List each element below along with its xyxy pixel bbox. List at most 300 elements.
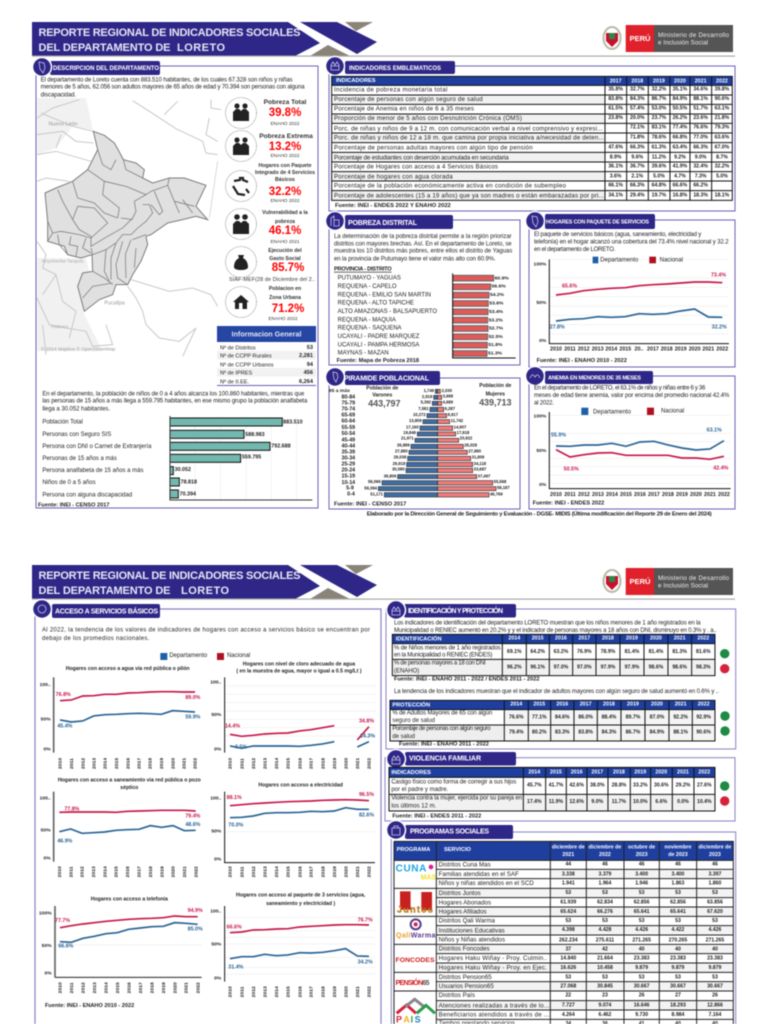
table: proteccion: PROTECCIÓN — [392, 701, 430, 709]
table: programas sociales: 3.400 — [672, 871, 685, 877]
line chart: nivel de cloro adecuado: 0.5% — [235, 744, 247, 750]
bar chart: poblacion: Persona con DNI o Carnet de Extranjería — [42, 444, 152, 450]
line chart: hogares con paquete: Fuente: INEI - ENAHO 2010 - 2022 — [537, 358, 627, 364]
legend: departamento y nacional: Departamento — [169, 653, 208, 659]
header banner: page 2: DEL DEPARTAMENTO DE — [38, 585, 170, 597]
line chart: electricidad: 2015 — [286, 866, 292, 877]
heading: indicadores emblematicos: INDICADORES EMBLEMATICOS — [349, 66, 441, 72]
chart: population pyramid: 15-19 — [342, 474, 355, 480]
table: programas sociales: 3.338 — [562, 871, 575, 877]
content: pobreza distrital text and bars: 53.4% — [489, 309, 504, 315]
map: Loreto department — [37, 98, 221, 356]
table: programas sociales: 65.641 — [634, 909, 650, 915]
header banner: page 1: LORETO — [177, 42, 225, 54]
table: violencia familiar: Castigo físico como forma de corregir a sus hijos — [391, 780, 516, 786]
table: informacion general: 2,281 — [299, 353, 313, 359]
table: proteccion: 2018 — [603, 701, 615, 707]
content: pobreza distrital text and bars: 53.2% — [489, 317, 503, 323]
table: indicadores: 83.1% — [652, 125, 667, 131]
table: violencia familiar: 2014 — [528, 770, 540, 776]
line chart: electricidad: Hogares con acceso a electricidad — [258, 783, 343, 789]
chart: population pyramid: 27,880 — [395, 449, 408, 454]
table: programas sociales: 53 — [639, 974, 645, 980]
table: violencia familiar — [389, 767, 715, 819]
stat: pobreza extrema: Pobreza Extrema — [259, 133, 313, 140]
table: indicadores: Porcentaje de Anemia en niños de 6 a 35 meses — [334, 106, 474, 113]
stat: poblacion en zona urbana — [226, 286, 304, 322]
table: indicadores: 35.1% — [673, 87, 688, 93]
text block: acceso intro: debajo de los promedios nacionales. — [42, 636, 150, 642]
table: programas sociales: 53 — [565, 890, 571, 896]
table: programas sociales: Hogares Haku Wiñay - Proy. Culmin.. — [439, 955, 547, 962]
line chart: nivel de cloro adecuado: 0% — [214, 746, 222, 752]
line chart: paquete de 3 servicios: 2020 — [343, 986, 349, 997]
content: pobreza distrital text and bars: 51.8% — [488, 342, 503, 348]
bar chart: poblacion: 78.818 — [181, 479, 197, 485]
content: pobreza distrital text and bars: PUTUMAYO - YAGUAS — [338, 275, 401, 281]
table: programas sociales — [394, 841, 733, 1024]
heading: piramide poblacional — [326, 368, 440, 386]
line chart: paquete de 3 servicios: 2019 — [332, 986, 338, 997]
table: programas sociales: 53 — [675, 918, 681, 924]
table: programas sociales: 1.946 — [635, 881, 648, 887]
chart: population pyramid: 50-54 — [342, 431, 355, 437]
text block: description: discapacidad. — [41, 93, 76, 99]
line chart: paquete de 3 servicios: 2010 — [228, 986, 234, 997]
header banner: page 1: DEL DEPARTAMENTO DE — [38, 42, 170, 54]
line chart: saneamiento: 2016 — [125, 866, 131, 877]
line chart: hogares con paquete: 100% — [534, 261, 547, 267]
table: programas sociales: 16.646 — [634, 1003, 650, 1009]
table: proteccion: 2022 — [698, 701, 710, 707]
line chart: nivel de cloro adecuado: 2022 — [367, 758, 373, 769]
table: programas sociales: 16.626 — [560, 965, 576, 971]
line chart: nivel de cloro adecuado: 2019 — [332, 758, 338, 769]
table: indicadores: 23.6% — [693, 115, 708, 121]
chart: population pyramid: Varones — [372, 393, 392, 399]
table: violencia familiar: 33.2% — [633, 782, 648, 788]
line chart: hogares con paquete: 2012 — [578, 347, 590, 353]
heading: pobreza distrital — [326, 212, 453, 230]
line chart: electricidad: 88.1% — [227, 795, 242, 801]
line chart: agua via red publica: 0% — [43, 746, 51, 752]
logo: foncodes: FONCODES — [396, 957, 435, 964]
table: programas sociales: 1.860 — [709, 881, 722, 887]
line chart: hogares con paquete: 2021 — [702, 347, 714, 353]
line chart: anemia: Departamento — [593, 410, 632, 416]
stat: hogares con paquete integrado: 32.2% — [269, 186, 301, 198]
line chart: telefonia: 77.7% — [55, 918, 70, 924]
map: Loreto department: Moyobamba Tarapoto — [42, 258, 84, 263]
table: proteccion: 2014 — [510, 701, 522, 707]
line chart: anemia: Fuente: INEI - ENDES 2022 — [533, 500, 604, 506]
table: indicadores: Porcentaje de Hogares con acceso a 4 Servicios Básicos — [334, 163, 498, 170]
content: pobreza distrital text and bars: 52.5% — [489, 334, 503, 340]
line chart: agua via red publica: 45.4% — [57, 723, 73, 729]
chart: population pyramid: 59,394 — [364, 485, 378, 490]
table: indicadores: 21.8% — [715, 115, 730, 121]
table: indicadores: 26.2% — [673, 115, 688, 121]
chart: population pyramid: 31,809 — [472, 454, 485, 459]
line chart: saneamiento — [40, 778, 201, 877]
chart: population pyramid: 3,698 — [443, 394, 454, 399]
line chart: hogares con paquete: 20.. — [635, 347, 644, 353]
panel: indicadores emblematicos — [326, 56, 735, 211]
table: identificacion: 81.4% — [649, 649, 664, 655]
table: programas sociales: Beneficiarios atendidos a través de ... — [439, 1011, 550, 1018]
table: programas sociales: 30.667 — [707, 984, 723, 990]
chart: population pyramid: 58,187 — [497, 485, 510, 490]
logo: pension 65: PENSIÓN65 — [396, 978, 430, 987]
heading: identificacion y proteccion: IDENTIFICACIÓN Y PROTECCIÓN — [408, 606, 503, 615]
line chart: hogares con paquete: 2011 — [564, 347, 576, 353]
heading: programas sociales — [386, 820, 513, 840]
bar chart: poblacion: Población Total — [42, 420, 83, 426]
table: indicadores: 64.8% — [652, 183, 667, 189]
table: indicadores: 9.6% — [631, 154, 644, 160]
table: programas sociales: 2023 — [709, 852, 721, 858]
table: indicadores: Porc. de niñas y niños de 9 a 12 m. con comunicación verbal a nivel comprensivo y expresi... — [334, 125, 603, 132]
stat: pobreza total: ENAHO 2022 — [270, 121, 300, 127]
table: indicadores: 47.6% — [608, 144, 623, 150]
table: informacion general: 94 — [307, 362, 314, 368]
table: programas sociales: PROGRAMA — [397, 847, 430, 853]
table: identificacion: 2021 — [674, 636, 686, 642]
table: violencia familiar: 2020 — [655, 770, 667, 776]
table: programas sociales: 9.879 — [709, 965, 722, 971]
content: pobreza distrital text and bars: MAYNAS - MAZAN — [338, 351, 389, 357]
panel: piramide poblacional — [326, 368, 520, 509]
table: indicadores: 36.1% — [608, 163, 623, 169]
footer note: elaborado por: Elaborado por la Dirección General de Seguimiento y Evaluación - DGSE- MIDIS (Última modificación del Reporte 29 de Enero del 2024) — [367, 510, 712, 518]
table: informacion general: 6,264 — [299, 379, 314, 385]
line chart: hogares con paquete: 0% — [539, 338, 547, 344]
table: indicadores: 3.6% — [610, 173, 622, 179]
table: violencia familiar: 2021 — [677, 770, 689, 776]
table: violencia familiar: 2019 — [634, 770, 646, 776]
table: identificacion: 69.1% — [507, 649, 522, 655]
line chart: agua via red publica — [40, 666, 201, 769]
content: pobreza distrital text and bars: muestra los 10 distritos más pobres, entre ellos el distrito de Yaguas — [334, 249, 512, 255]
line chart: anemia: 2016 — [634, 492, 646, 498]
line chart: saneamiento: 79.4% — [185, 813, 201, 819]
line chart: saneamiento: 2015 — [114, 866, 120, 877]
table: indicadores: 32.2% — [652, 87, 667, 93]
table: programas sociales: 23.383 — [670, 956, 686, 962]
line chart: agua via red publica: 2017 — [136, 758, 142, 769]
table: programas sociales: 22 — [565, 993, 571, 999]
line chart: saneamiento: 2017 — [137, 866, 143, 877]
line chart: telefonia: 94.9% — [188, 908, 203, 914]
table: violencia familiar: 2016 — [571, 770, 583, 776]
table: indicadores: 50.5% — [673, 106, 688, 112]
table: programas sociales: 4.264 — [562, 1012, 575, 1018]
bar chart: poblacion: 792.688 — [271, 444, 291, 450]
line chart: hogares con paquete: 2014 — [605, 347, 617, 353]
chart: population pyramid: 56,066 — [368, 479, 381, 484]
table: violencia familiar: 2022 — [698, 770, 710, 776]
line chart: agua via red publica: 2022 — [193, 758, 199, 769]
bar chart: poblacion: 70.394 — [180, 491, 196, 497]
table: identificacion: Municipalidad o RENIEC aumentó en 20.2% y y el indicador de personas mayores a 18 años con DNI, disminuyo en 0.3% y . a.. — [394, 628, 717, 634]
table: violencia familiar: 2015 — [550, 770, 562, 776]
line chart: hogares con paquete: 32.2% — [712, 325, 727, 331]
table: programas sociales: 46 — [675, 862, 681, 868]
line chart: paquete de 3 servicios: 34.2% — [358, 959, 373, 965]
table: violencia familiar: 2018 — [613, 770, 625, 776]
line chart: agua via red publica: 2016 — [125, 758, 131, 769]
line chart: hogares con paquete: 27.8% — [550, 325, 565, 331]
line chart: hogares con paquete: en el departamento de LORETO. — [534, 247, 616, 253]
line chart: telefonia: 2019 — [161, 982, 167, 993]
heading: descripcion del departamento: DESCRIPCION DEL DEPARTAMENTO — [53, 66, 159, 72]
line chart: agua via red publica: Hogares con acceso a agua vía red pública o pilón — [66, 666, 190, 672]
table: programas sociales: 42 — [602, 946, 608, 952]
line chart: anemia: meses de edad tiene anemia, valor por encima del promedio nacional 42.4% — [534, 393, 730, 399]
table: programas sociales: 7.727 — [562, 1003, 575, 1009]
header banner: page 2: LORETO — [181, 585, 229, 597]
line chart: anemia: 0% — [539, 482, 547, 488]
table: identificacion: % de Niños menores de 1 año registrados — [394, 646, 501, 652]
table: programas sociales: Usuarios Pension65 — [439, 983, 494, 990]
table: informacion general: 456 — [304, 370, 313, 376]
table: violencia familiar: 11.7% — [612, 799, 627, 805]
table: indicadores: 16.8% — [673, 193, 688, 199]
line chart: hogares con paquete: 2017 — [647, 347, 659, 353]
line chart: paquete de 3 servicios: 2012 — [251, 986, 257, 997]
table: identificacion: 96.2% — [507, 665, 522, 671]
table: programas sociales: Hogares Haku Wiñay - Proy. en Ejec. — [439, 964, 547, 971]
table: indicadores: 9.2% — [674, 154, 686, 160]
table: programas sociales: 53 — [565, 974, 571, 980]
line chart: nivel de cloro adecuado: 2015 — [286, 758, 292, 769]
chart: population pyramid: 0-4 — [347, 492, 355, 498]
table: indicadores: 90.6% — [715, 96, 730, 102]
table: identificacion: Los indicadores de identificación del departamento LORETO muestran que los niños menores de 1 año registrados en la — [394, 620, 701, 626]
line chart: electricidad: 2016 — [297, 866, 303, 877]
table: programas sociales: 62.856 — [670, 899, 686, 905]
content: pobreza distrital text and bars: 51.3% — [488, 351, 503, 357]
table: programas sociales: 46 — [712, 862, 718, 868]
chart: population pyramid: 26,028 — [464, 443, 478, 448]
table: identificacion: 2018 — [602, 636, 614, 642]
table: programas sociales: 26 — [639, 993, 645, 999]
content: pobreza distrital text and bars: ALTO AMAZONAS - BALSAPUERTO — [338, 309, 437, 315]
table: proteccion: 84.6% — [555, 714, 570, 720]
table: indicadores: Porc. de niñas y niños de 12 a 18 m. que camina por propia iniciativa a/necesidad de deten... — [334, 134, 604, 141]
panel: identificacion y proteccion — [386, 600, 736, 749]
table: indicadores: 41.9% — [673, 163, 688, 169]
table: programas sociales: 53 — [712, 890, 718, 896]
logo: cuna mas: MAS — [421, 874, 436, 881]
table: indicadores: 66.2% — [693, 183, 708, 189]
chart: population pyramid: 34,118 — [474, 461, 487, 466]
table: violencia familiar: 6.6% — [655, 799, 668, 805]
table: indicadores: Porcentaje de personas adultas mayores con algún tipo de pensión — [334, 144, 533, 151]
table: informacion general: Nº de Distritos — [220, 344, 256, 352]
table: programas sociales: 40 — [712, 946, 718, 952]
line chart: anemia: 2021 — [704, 492, 716, 498]
chart: population pyramid: 5,392 — [421, 400, 432, 405]
logo: qali warma: QaliWarma — [396, 932, 435, 939]
bar chart: poblacion: 559.795 — [242, 455, 261, 461]
table: identificacion: 98.6% — [649, 665, 664, 671]
heading: violencia familiar — [386, 750, 516, 768]
table: indicadores — [332, 76, 732, 200]
table: programas sociales: noviembre — [664, 845, 691, 851]
stat: pobreza total: 39.8% — [269, 107, 301, 119]
table: violencia familiar: 27.6% — [697, 782, 712, 788]
chart: population pyramid: 27,890 — [468, 449, 482, 454]
bar chart: poblacion: Personas de 15 años a más — [42, 456, 117, 462]
chart: population pyramid: 1,749 — [424, 388, 435, 393]
line chart: saneamiento: 2020 — [171, 866, 177, 877]
table: indicadores: 83.8% — [608, 96, 623, 102]
line chart: saneamiento: 2013 — [91, 866, 97, 877]
table: indicadores: 18.3% — [693, 193, 708, 199]
stat: pobreza extrema — [226, 130, 313, 162]
line chart: telefonia: 2020 — [172, 982, 178, 993]
line chart: paquete de 3 servicios: 2017 — [309, 986, 315, 997]
table: indicadores: 51.7% — [693, 106, 708, 112]
table: indicadores: 34.6% — [693, 87, 708, 93]
line chart: anemia: 50.5% — [564, 467, 579, 473]
table: violencia familiar: 10.4% — [697, 799, 712, 805]
table: programas sociales: 271.265 — [706, 937, 724, 943]
line chart: anemia: 2013 — [592, 492, 604, 498]
line chart: electricidad: 2014 — [274, 866, 280, 877]
line chart: hogares con paquete: El paquete de servicios básicos (agua, saneamiento, electricidad y — [534, 232, 701, 238]
chart: population pyramid: 39,806 — [384, 473, 397, 478]
line chart: saneamiento: Hogares con acceso a saneamiento vía red pública o pozo — [58, 778, 201, 784]
table: indicadores: 77.0% — [693, 134, 708, 140]
text block: description: El departamento de Loreto cuenta con 883.510 habitantes, de los cuales 67.328 son niños y niñas — [41, 78, 293, 84]
line chart: saneamiento: 77.8% — [64, 806, 80, 812]
table: programas sociales: 2021 — [562, 852, 574, 858]
table: indicadores: 5.0% — [653, 173, 665, 179]
line chart: hogares con paquete: 73.4% — [711, 272, 726, 278]
line chart: saneamiento: séptico — [120, 785, 138, 791]
table: programas sociales: 66.276 — [597, 909, 613, 915]
header banner: page 1: REPORTE REGIONAL DE INDICADORES SOCIALES — [38, 27, 300, 39]
line chart: nivel de cloro adecuado: 2012 — [251, 758, 257, 769]
table: proteccion: 89.7% — [626, 714, 641, 720]
line chart: electricidad: 2022 — [367, 866, 373, 877]
line chart: telefonia: 2016 — [126, 982, 132, 993]
header banner: page 2 — [32, 565, 735, 600]
line chart: hogares con paquete: 2022 — [716, 347, 728, 353]
line chart: paquete de 3 servicios: 2018 — [320, 986, 326, 997]
table: indicadores: 66.6% — [673, 183, 688, 189]
chart: population pyramid: 29,918 — [393, 461, 406, 466]
line chart: electricidad: 96.5% — [359, 792, 374, 798]
table: programas sociales: 53 — [602, 890, 608, 896]
line chart: telefonia: 0% — [44, 971, 52, 977]
logo: Peru ministry, page 2 — [604, 568, 733, 595]
line chart: saneamiento: 2021 — [182, 866, 188, 877]
chart: population pyramid: 35-39 — [342, 450, 355, 456]
stat: pobreza total — [226, 98, 307, 128]
line chart: agua via red publica: 2019 — [159, 758, 165, 769]
table: violencia familiar: 38.0% — [590, 782, 605, 788]
line chart: telefonia: 2014 — [104, 982, 110, 993]
table: indicadores: 36.7% — [630, 163, 645, 169]
line chart: agua via red publica: 2013 — [91, 758, 97, 769]
line chart: paquete de 3 servicios: 2013 — [262, 986, 268, 997]
line chart: paquete de 3 servicios: 2022 — [367, 986, 373, 997]
line chart: paquete de 3 servicios: 2011 — [239, 986, 245, 997]
table: proteccion: 87.0% — [650, 714, 665, 720]
content: pobreza distrital text and bars: La determinación de la pobreza distrital permite a la región priorizar — [334, 234, 512, 240]
chart: population pyramid: 11,742 — [451, 418, 464, 423]
table: indicadores: 63.1% — [715, 106, 730, 112]
content: pobreza distrital text and bars: REQUENA - ALTO TAPICHE — [338, 301, 414, 307]
panel: anemia en menores de 35 meses — [526, 366, 735, 509]
bar chart: poblacion: Personas con Seguro SIS — [42, 432, 111, 438]
table: programas sociales: Hogares Abonados — [439, 899, 491, 906]
table: violencia familiar: 30.6% — [654, 782, 669, 788]
line chart: saneamiento: 100.. — [40, 796, 51, 802]
table: programas sociales: 61.939 — [560, 899, 576, 905]
chart: population pyramid: 80-84 — [342, 394, 355, 400]
table: identificacion: 96.1% — [530, 665, 545, 671]
table: programas sociales: 12.866 — [707, 1003, 723, 1009]
table: identificacion: IDENTIFICACIÓN — [396, 635, 442, 643]
table: proteccion: 86.0% — [578, 714, 593, 720]
line chart: nivel de cloro adecuado: 50% — [211, 712, 222, 718]
line chart: telefonia: 2012 — [81, 982, 87, 993]
table: programas sociales: diciembre de — [589, 845, 621, 851]
table: violencia familiar: Violencia contra la mujer, ejercida por su pareja en — [391, 796, 522, 802]
line chart: anemia: 2015 — [620, 492, 632, 498]
line chart: nivel de cloro adecuado: 2013 — [262, 758, 268, 769]
line chart: electricidad: 2010 — [228, 866, 234, 877]
table: programas sociales: 53 — [639, 890, 645, 896]
line chart: electricidad: 2013 — [262, 866, 268, 877]
map: Loreto department: Nuevo León — [49, 121, 77, 127]
chart: population pyramid: 10-14 — [342, 480, 355, 486]
stat: hogares con paquete integrado: Hogares con Paquete — [258, 163, 312, 169]
line chart: nivel de cloro adecuado: 2020 — [343, 758, 349, 769]
table: indicadores: 88.1% — [693, 96, 708, 102]
table: identificacion: en la Municipalidad o RENIEC (ENDES) — [394, 653, 492, 659]
text block: description: menores de 5 años, 62.056 son adultos mayores de 65 años de edad y 70.394 son personas con alguna — [41, 84, 305, 90]
table: violencia familiar: 45.7% — [527, 782, 542, 788]
table: violencia familiar: INDICADORES — [391, 770, 431, 776]
chart: population pyramid: 4,689 — [443, 400, 454, 405]
table: programas sociales: diciembre de — [552, 845, 585, 851]
table: programas sociales: 46 — [639, 862, 645, 868]
chart: population pyramid: 17,160 — [406, 425, 419, 430]
table: programas sociales: Distritos Juntos — [439, 890, 481, 897]
content: pobreza distrital text and bars: UCAYALI - PADRE MARQUEZ — [338, 334, 420, 340]
table: indicadores: 61.5% — [608, 106, 623, 112]
stat: ejecucion del gasto social: 85.7% — [272, 262, 304, 274]
table: proteccion: La tendencia de los indicadores muestran que el indicador de adultos mayores con algún seguro de salud aumentó en 0.6% y .. — [394, 689, 719, 695]
line chart: electricidad: 2011 — [239, 866, 245, 877]
line chart: electricidad: 2017 — [309, 866, 315, 877]
logo: Peru ministry, page 2: Ministerio de Desarrollo — [658, 575, 730, 582]
table: indicadores: 61.3% — [652, 144, 667, 150]
table: informacion general: 53 — [307, 345, 313, 351]
table: programas sociales: 4.398 — [562, 927, 575, 933]
legend: departamento y nacional — [160, 653, 250, 660]
content: pobreza distrital text and bars: 56.6% — [492, 283, 506, 289]
chart: population pyramid: 439,713 — [479, 398, 512, 408]
table: indicadores: 32.4% — [693, 163, 708, 169]
line chart: saneamiento: 48.6% — [185, 822, 201, 828]
table: indicadores: 29.4% — [630, 193, 645, 199]
